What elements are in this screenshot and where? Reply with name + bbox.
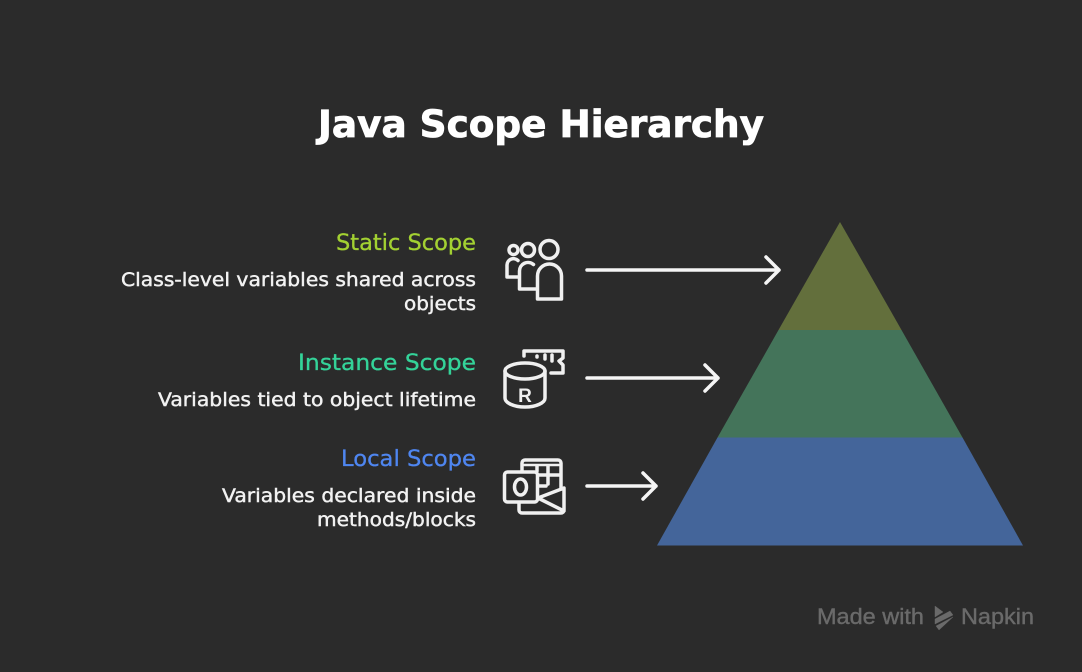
watermark: made with Napkin: Made with	[817, 604, 924, 629]
panel: local scope text	[222, 447, 476, 531]
icon: people group	[507, 240, 562, 299]
heading: instance scope: Instance Scope	[298, 351, 476, 376]
description: local scope	[222, 485, 476, 531]
description: static scope: Class-level variables shared across	[121, 269, 476, 291]
arrow: static	[587, 257, 779, 283]
heading: static scope: Static Scope	[336, 231, 476, 256]
icon: R database	[505, 351, 563, 407]
watermark: made with Napkin: Napkin	[961, 604, 1034, 629]
panel: static scope text	[121, 231, 476, 315]
description: instance scope: Variables tied to object lifetime	[158, 389, 476, 411]
arrow: local	[587, 473, 656, 499]
icon: Napkin logo	[935, 606, 953, 630]
pyramid	[657, 222, 1023, 546]
pyramid tier: static	[778, 222, 902, 330]
description: local scope: methods/blocks	[317, 509, 476, 531]
watermark: made with Napkin	[817, 604, 1034, 630]
description: static scope	[121, 269, 476, 315]
description: local scope: Variables declared inside	[222, 485, 476, 507]
title: Java Scope Hierarchy	[315, 103, 764, 146]
icon: outlook mail	[504, 460, 564, 513]
panel: instance scope text	[158, 351, 476, 411]
arrow: instance	[587, 365, 718, 391]
icon: R database: R	[518, 386, 532, 407]
pyramid tier: local	[657, 438, 1023, 546]
heading: local scope: Local Scope	[341, 447, 476, 472]
description: static scope: objects	[404, 293, 476, 315]
pyramid tier: instance	[718, 330, 962, 438]
